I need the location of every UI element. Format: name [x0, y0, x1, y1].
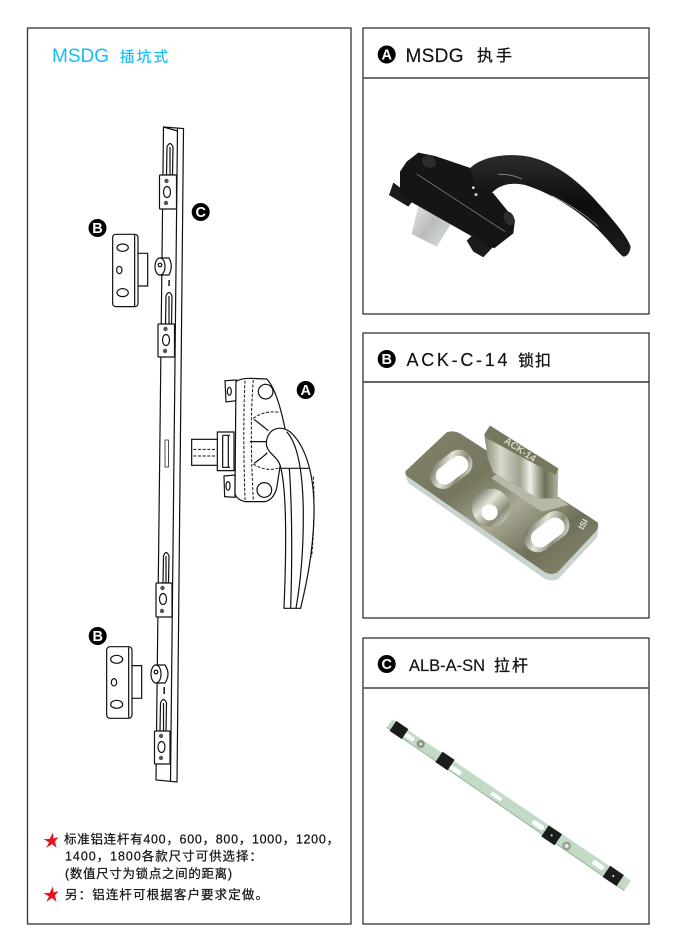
heading: MSDG 插坑式: MSDG — [52, 46, 109, 67]
diagram: upper striker plate — [113, 234, 148, 307]
heading: C ALB-A-SN 拉杆 — [378, 655, 528, 675]
heading: A MSDG 执手: 执手 — [477, 47, 512, 65]
heading: MSDG 插坑式: 插坑式 — [120, 49, 168, 66]
heading: MSDG 插坑式 — [52, 46, 168, 67]
panel: MSDG assembly diagram — [28, 28, 351, 924]
text: custom order note: 另：铝连杆可根据客户要求定做。 — [65, 887, 268, 902]
photo: black handle — [389, 153, 631, 257]
photo: chrome striker plate: ACK-14 — [502, 436, 538, 465]
heading: B ACK-C-14 锁扣: 锁扣 — [518, 352, 551, 370]
text: standard sizes note: 标准铝连杆有400，600，800，1000，1200， — [64, 832, 339, 846]
heading: B ACK-C-14 锁扣 — [378, 350, 551, 370]
text: standard sizes note — [64, 832, 339, 881]
heading: A MSDG 执手 — [378, 46, 512, 67]
diagram: lower striker plate — [107, 647, 142, 718]
diagram: lower striker roller — [151, 665, 168, 683]
heading: C ALB-A-SN 拉杆: 拉杆 — [494, 657, 528, 675]
diagram: connecting rod — [154, 127, 184, 782]
heading: B ACK-C-14 锁扣: ACK-C-14 — [406, 350, 508, 370]
badge: A: A — [300, 383, 311, 399]
heading: A MSDG 执手: MSDG — [406, 46, 464, 67]
heading: A MSDG 执手: A — [381, 48, 392, 64]
diagram: handle line drawing — [192, 378, 314, 608]
heading: B ACK-C-14 锁扣: B — [381, 352, 392, 368]
photo: aluminium rod — [387, 719, 631, 891]
badge: B upper — [88, 219, 106, 237]
photo: chrome striker plate: ISI — [576, 517, 590, 531]
text: standard sizes note: (数值尺寸为锁点之间的距离) — [65, 866, 232, 881]
icon: red star two — [44, 886, 58, 902]
badge: C: C — [195, 205, 206, 221]
badge: B lower — [89, 627, 107, 645]
panel: C rod — [363, 638, 649, 924]
badge: C — [192, 203, 210, 221]
photo: chrome striker plate — [405, 426, 598, 580]
badge: A — [297, 381, 315, 399]
badge: B upper: B — [92, 221, 103, 237]
panel: B striker — [363, 333, 649, 618]
icon: red star one — [44, 832, 58, 848]
panel: A handle — [363, 28, 649, 314]
heading: C ALB-A-SN 拉杆: C — [381, 657, 392, 673]
text: standard sizes note: 1400，1800各款尺寸可供选择： — [65, 848, 262, 864]
diagram: upper striker roller — [155, 258, 171, 275]
badge: B lower: B — [92, 629, 103, 645]
heading: C ALB-A-SN 拉杆: ALB-A-SN — [409, 657, 485, 675]
